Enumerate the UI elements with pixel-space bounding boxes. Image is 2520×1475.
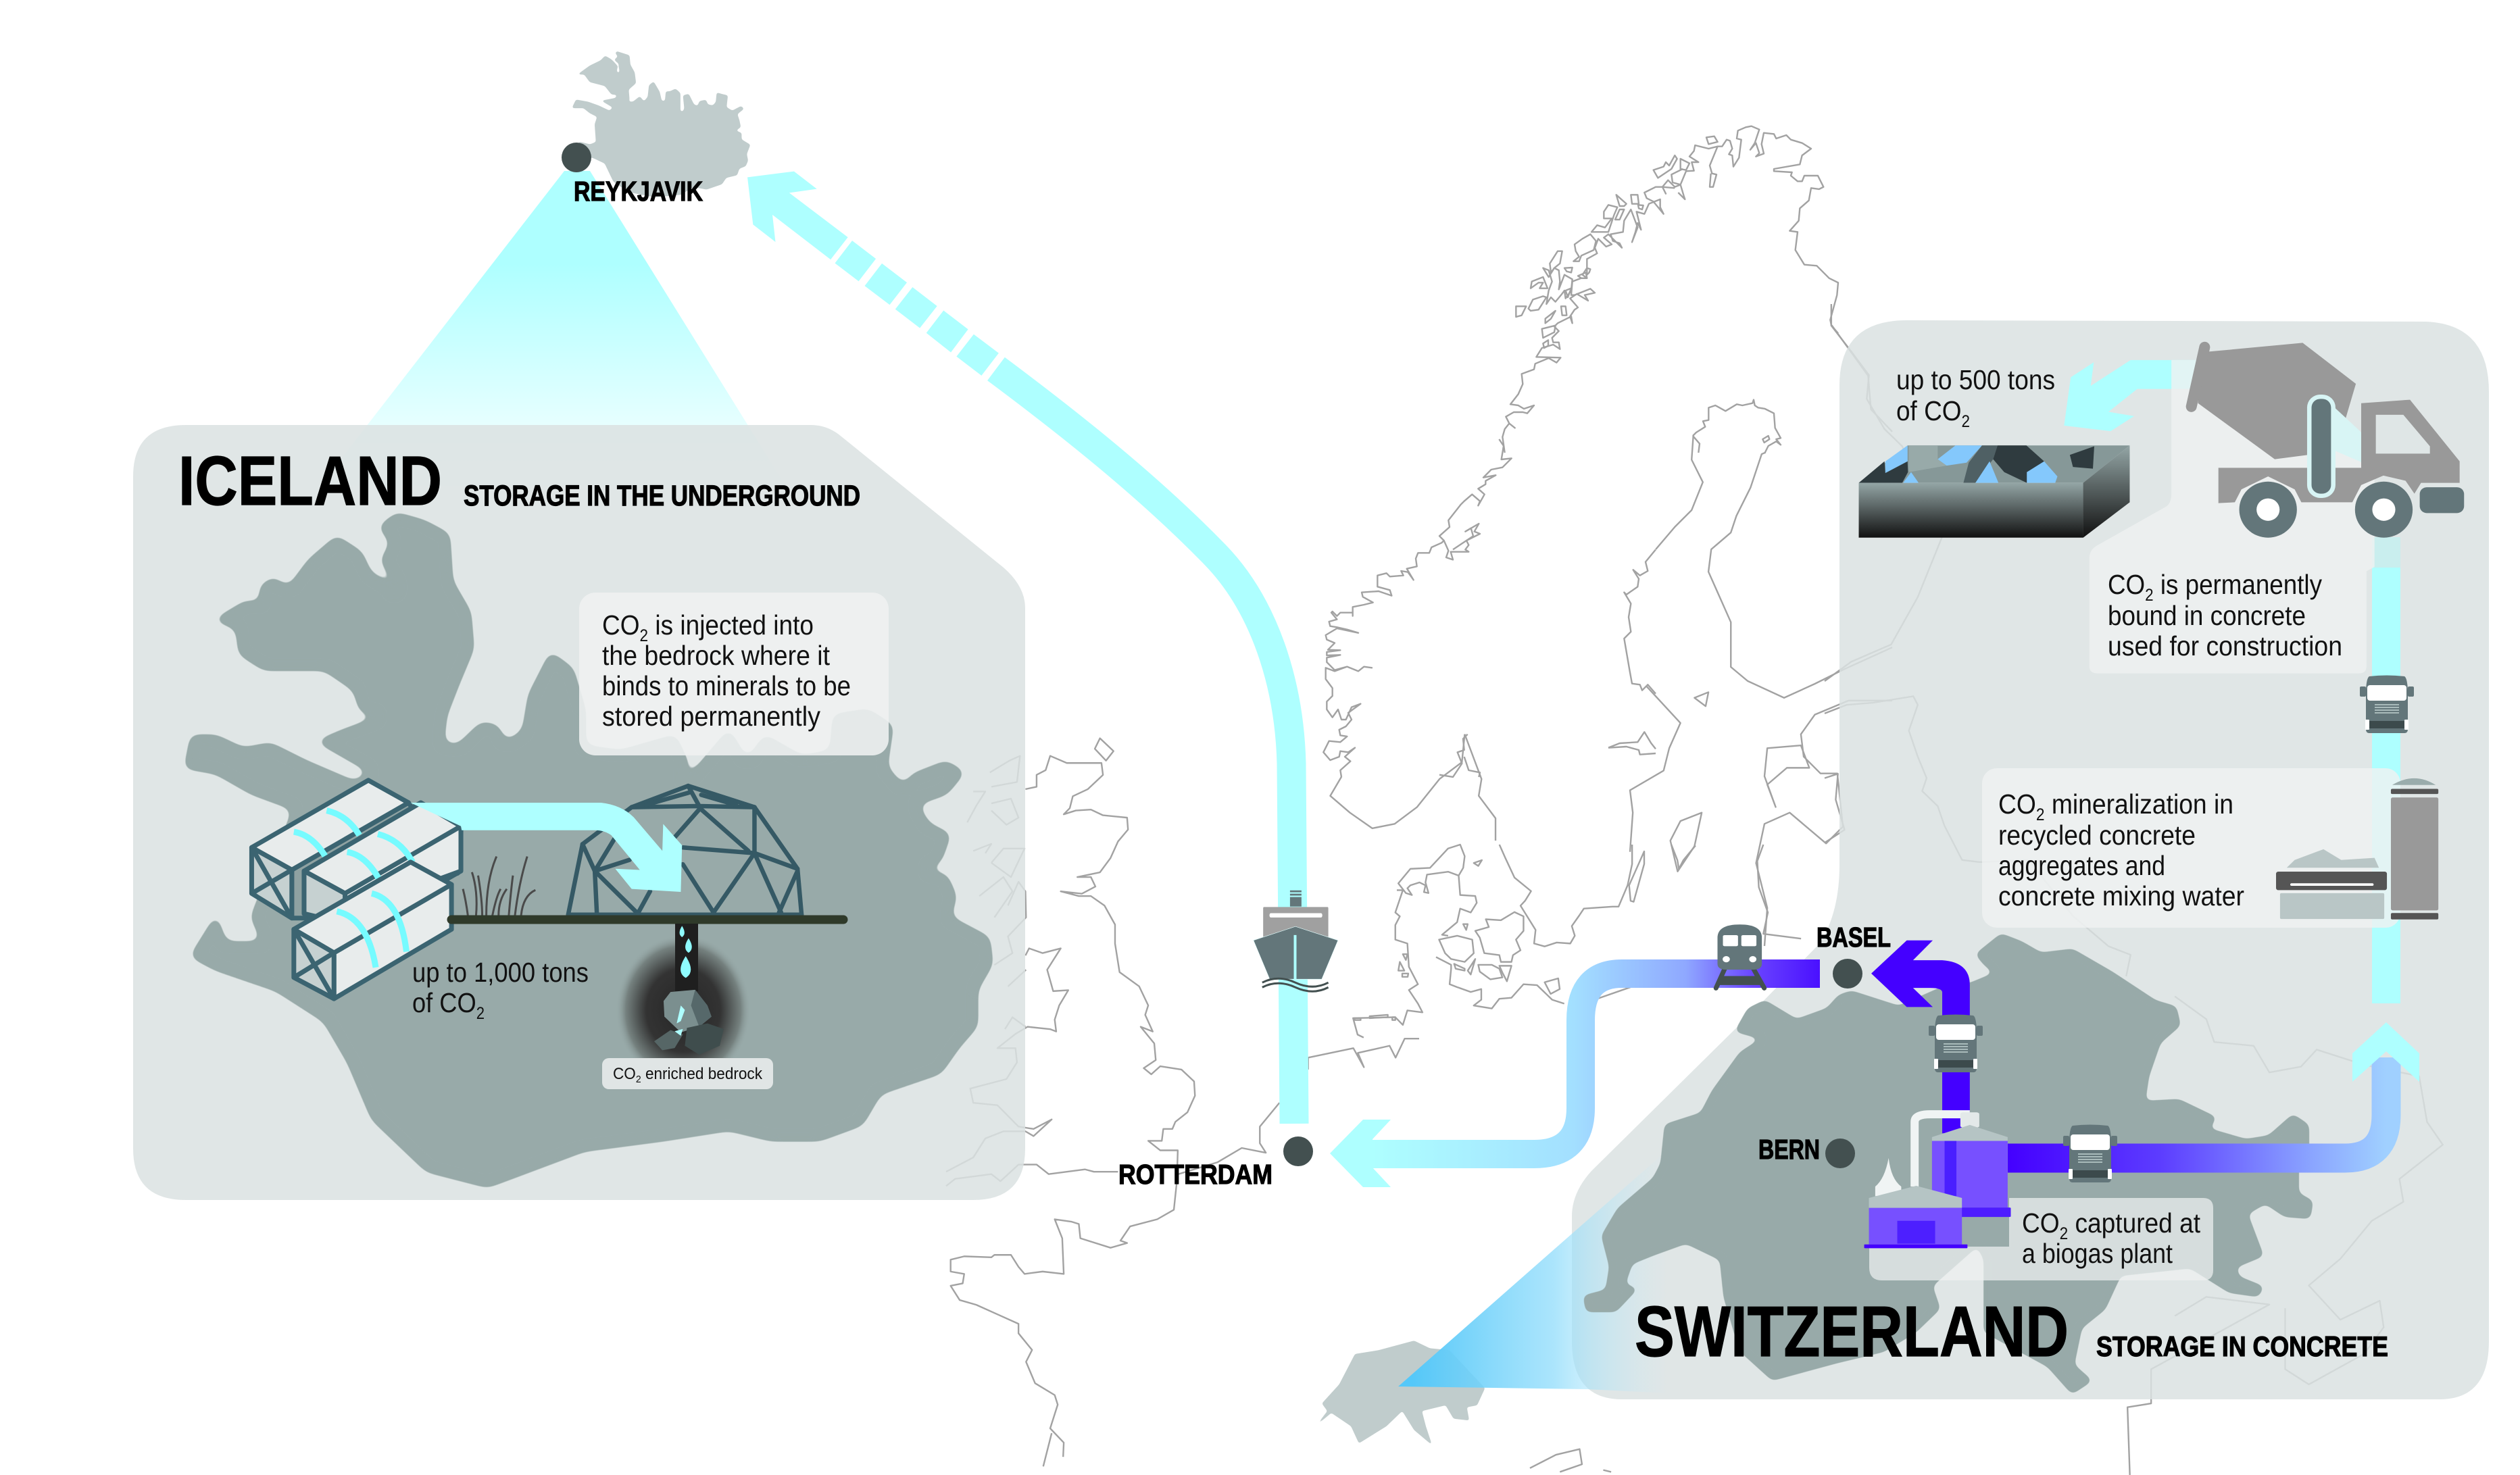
icon: mineralization plant: [2276, 778, 2438, 920]
large map: Switzerland: [1585, 935, 2311, 1392]
panel: Iceland: [133, 425, 1025, 1200]
label: CO2 enriched bedrock: enriched bedrock: [641, 1065, 763, 1083]
text box: concrete binding: 2: [2145, 586, 2154, 605]
city marker: Reykjavik: REYKJAVIK: [574, 176, 703, 207]
text box: injection: CO: [602, 609, 643, 641]
heading: Iceland: [178, 442, 860, 520]
text: up to 500 tons: 2: [1961, 412, 1970, 431]
arrow: CO2 to concrete: [2064, 360, 2197, 431]
heading: Switzerland: [1635, 1292, 2388, 1372]
icon: truck to Basel: [1929, 1015, 1983, 1072]
text box: injection: the bedrock where it: [602, 640, 831, 671]
text box: injection: stored permanently: [602, 701, 820, 732]
text box: biogas plant: captured at: [2068, 1207, 2201, 1239]
label: CO2 enriched bedrock: CO: [613, 1065, 637, 1083]
text: up to 1,000 tons: [412, 957, 589, 1023]
illustration: CO2 injection site: [251, 780, 801, 999]
text box: injection: is injected into: [648, 609, 814, 641]
heading: Iceland: STORAGE IN THE UNDERGROUND: [464, 480, 860, 512]
city marker: Basel: [1817, 922, 1891, 989]
city marker: Bern: BERN: [1758, 1134, 1820, 1165]
label: CO2 enriched bedrock: 2: [636, 1074, 641, 1085]
text: up to 500 tons: up to 500 tons: [1896, 364, 2055, 395]
text box: biogas plant: a biogas plant: [2022, 1238, 2173, 1269]
label: CO2 enriched bedrock: [602, 1058, 773, 1089]
arrow: CO2 flow into ground: [411, 803, 682, 892]
pipeline: biogas plant to concrete site: [2008, 537, 2419, 1158]
text: up to 1,000 tons: 2: [476, 1004, 485, 1023]
heading: Switzerland: SWITZERLAND: [1635, 1292, 2069, 1372]
icon: biogas plant: [1864, 1112, 2011, 1248]
text box: concrete binding: CO: [2108, 569, 2149, 600]
city marker: Basel: BASEL: [1817, 922, 1891, 953]
small map: Switzerland: [1316, 1341, 1485, 1445]
text box: biogas plant: CO: [2022, 1207, 2064, 1239]
city marker: Reykjavik: [562, 143, 703, 207]
text box: mineralization: mineralization in: [2045, 789, 2233, 820]
text box: concrete binding: is permanently: [2154, 569, 2322, 600]
cone from Reykjavik to Iceland panel: [320, 171, 786, 486]
zoom wedge: Switzerland: [1398, 1149, 1669, 1393]
icon: storage containers: [251, 780, 461, 999]
text: up to 1,000 tons: up to 1,000 tons: [412, 957, 589, 988]
icon: train: [1716, 924, 1764, 988]
arrow: Basel to Rotterdam route: [1330, 974, 1820, 1187]
text box: mineralization: concrete mixing water: [1998, 880, 2244, 911]
map: Europe coastline: [946, 126, 2443, 1475]
text: up to 500 tons: of CO: [1896, 395, 1969, 426]
text box: injection: 2: [640, 626, 648, 645]
text: up to 500 tons: [1896, 364, 2055, 431]
text box: concrete binding: bound in concrete: [2108, 600, 2306, 631]
icon: truck on concrete line: [2360, 676, 2414, 733]
text box: concrete binding: [2090, 360, 2375, 674]
text box: biogas plant: [1869, 1198, 2213, 1280]
text box: injection: binds to minerals to be: [602, 670, 851, 701]
heading: Iceland: ICELAND: [178, 442, 442, 520]
icon: geodesic dome: [568, 786, 801, 915]
icon: concrete block: [1859, 445, 2129, 538]
text box: mineralization: CO: [1998, 789, 2040, 820]
arrow: Rotterdam to Reykjavik shipping route: [747, 172, 1294, 1124]
arrow: biogas plant to Basel: [1871, 941, 1970, 1133]
icon: grass: [463, 857, 535, 916]
panel: Switzerland: [1572, 320, 2489, 1399]
large map: Iceland: [186, 514, 991, 1186]
text: up to 1,000 tons: of CO: [412, 987, 485, 1018]
text box: biogas plant: 2: [2060, 1224, 2068, 1243]
icon: concrete mixer truck: [2192, 343, 2464, 538]
icon: truck from plant: [2063, 1124, 2117, 1182]
text box: mineralization: [1982, 768, 2400, 928]
text box: concrete binding: used for construction: [2108, 630, 2342, 661]
text box: mineralization: aggregates and: [1998, 850, 2165, 881]
icon: bedrock with droplets: [616, 924, 751, 1086]
city marker: Rotterdam: [1118, 1136, 1313, 1190]
heading: Switzerland: STORAGE IN CONCRETE: [2096, 1330, 2388, 1362]
text box: injection: [579, 593, 889, 755]
icon: ship: [1254, 891, 1338, 991]
text box: mineralization: recycled concrete: [1998, 820, 2196, 851]
ground line: [451, 915, 843, 924]
small map: Iceland: [573, 52, 749, 197]
text box: mineralization: 2: [2036, 805, 2045, 824]
city marker: Rotterdam: ROTTERDAM: [1118, 1159, 1273, 1190]
